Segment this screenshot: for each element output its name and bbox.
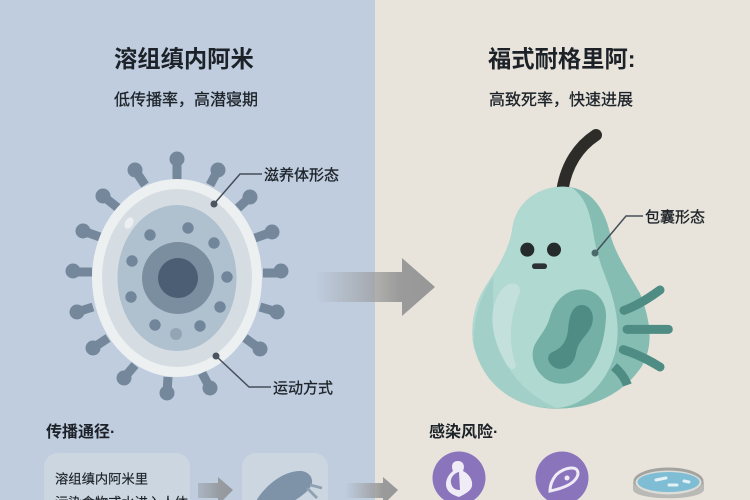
right title: 福式耐格里阿:: [488, 46, 636, 72]
pear body front: [472, 187, 618, 408]
flagella: [614, 290, 668, 385]
cell spikes: [66, 152, 288, 400]
cyst inner chamber: [533, 289, 606, 384]
cell membrane: [92, 179, 262, 377]
highlight: [492, 283, 520, 369]
pear-shaped cyst illustration: [472, 135, 668, 409]
heading: infection risk: 感染风险·: [429, 422, 498, 441]
heading: transmission route: 传播通径·: [46, 423, 115, 441]
icon: meat risk: [536, 452, 588, 500]
cytoplasm: [118, 205, 236, 351]
callout: trophozoite form: [210, 167, 339, 208]
nucleus: [142, 242, 214, 314]
arrow: card to organism: [198, 477, 233, 500]
pear left shading: [474, 277, 557, 408]
right eye: [547, 243, 561, 257]
cell inner rim: [102, 189, 252, 367]
right subtitle: 高致死率，快速进展: [489, 91, 633, 109]
callout: trophozoite form: 滋养体形态: [264, 167, 339, 184]
callout: cyst form: 包囊形态: [645, 209, 705, 226]
card: transmission text: [44, 453, 190, 500]
nucleolus: [158, 258, 198, 298]
card: transmission text: 溶组缜内阿米里: [55, 472, 148, 486]
trophozoite cell illustration: [66, 152, 288, 400]
mouth: [532, 263, 547, 269]
panel: right background: [375, 0, 750, 500]
left title: 溶组缜内阿米: [114, 46, 254, 72]
arrow: organism onward: [345, 477, 398, 500]
callout: motility: [212, 352, 333, 397]
panel: left background: [0, 0, 375, 500]
vesicles: [125, 222, 233, 340]
card: organism icon: [242, 453, 328, 500]
left subtitle: 低传播率，高潜寝期: [114, 90, 258, 109]
stem: [563, 135, 596, 188]
pear body shadow: [472, 187, 650, 409]
membrane highlight: [123, 216, 135, 230]
icon: pear risk: [432, 452, 486, 500]
callout: motility: 运动方式: [273, 380, 333, 397]
arrow: central transition: [315, 258, 435, 316]
cyst nucleus: [548, 305, 593, 369]
icon: water dish: [633, 468, 704, 498]
callout: cyst form: [592, 209, 705, 256]
eyes: [520, 243, 534, 257]
